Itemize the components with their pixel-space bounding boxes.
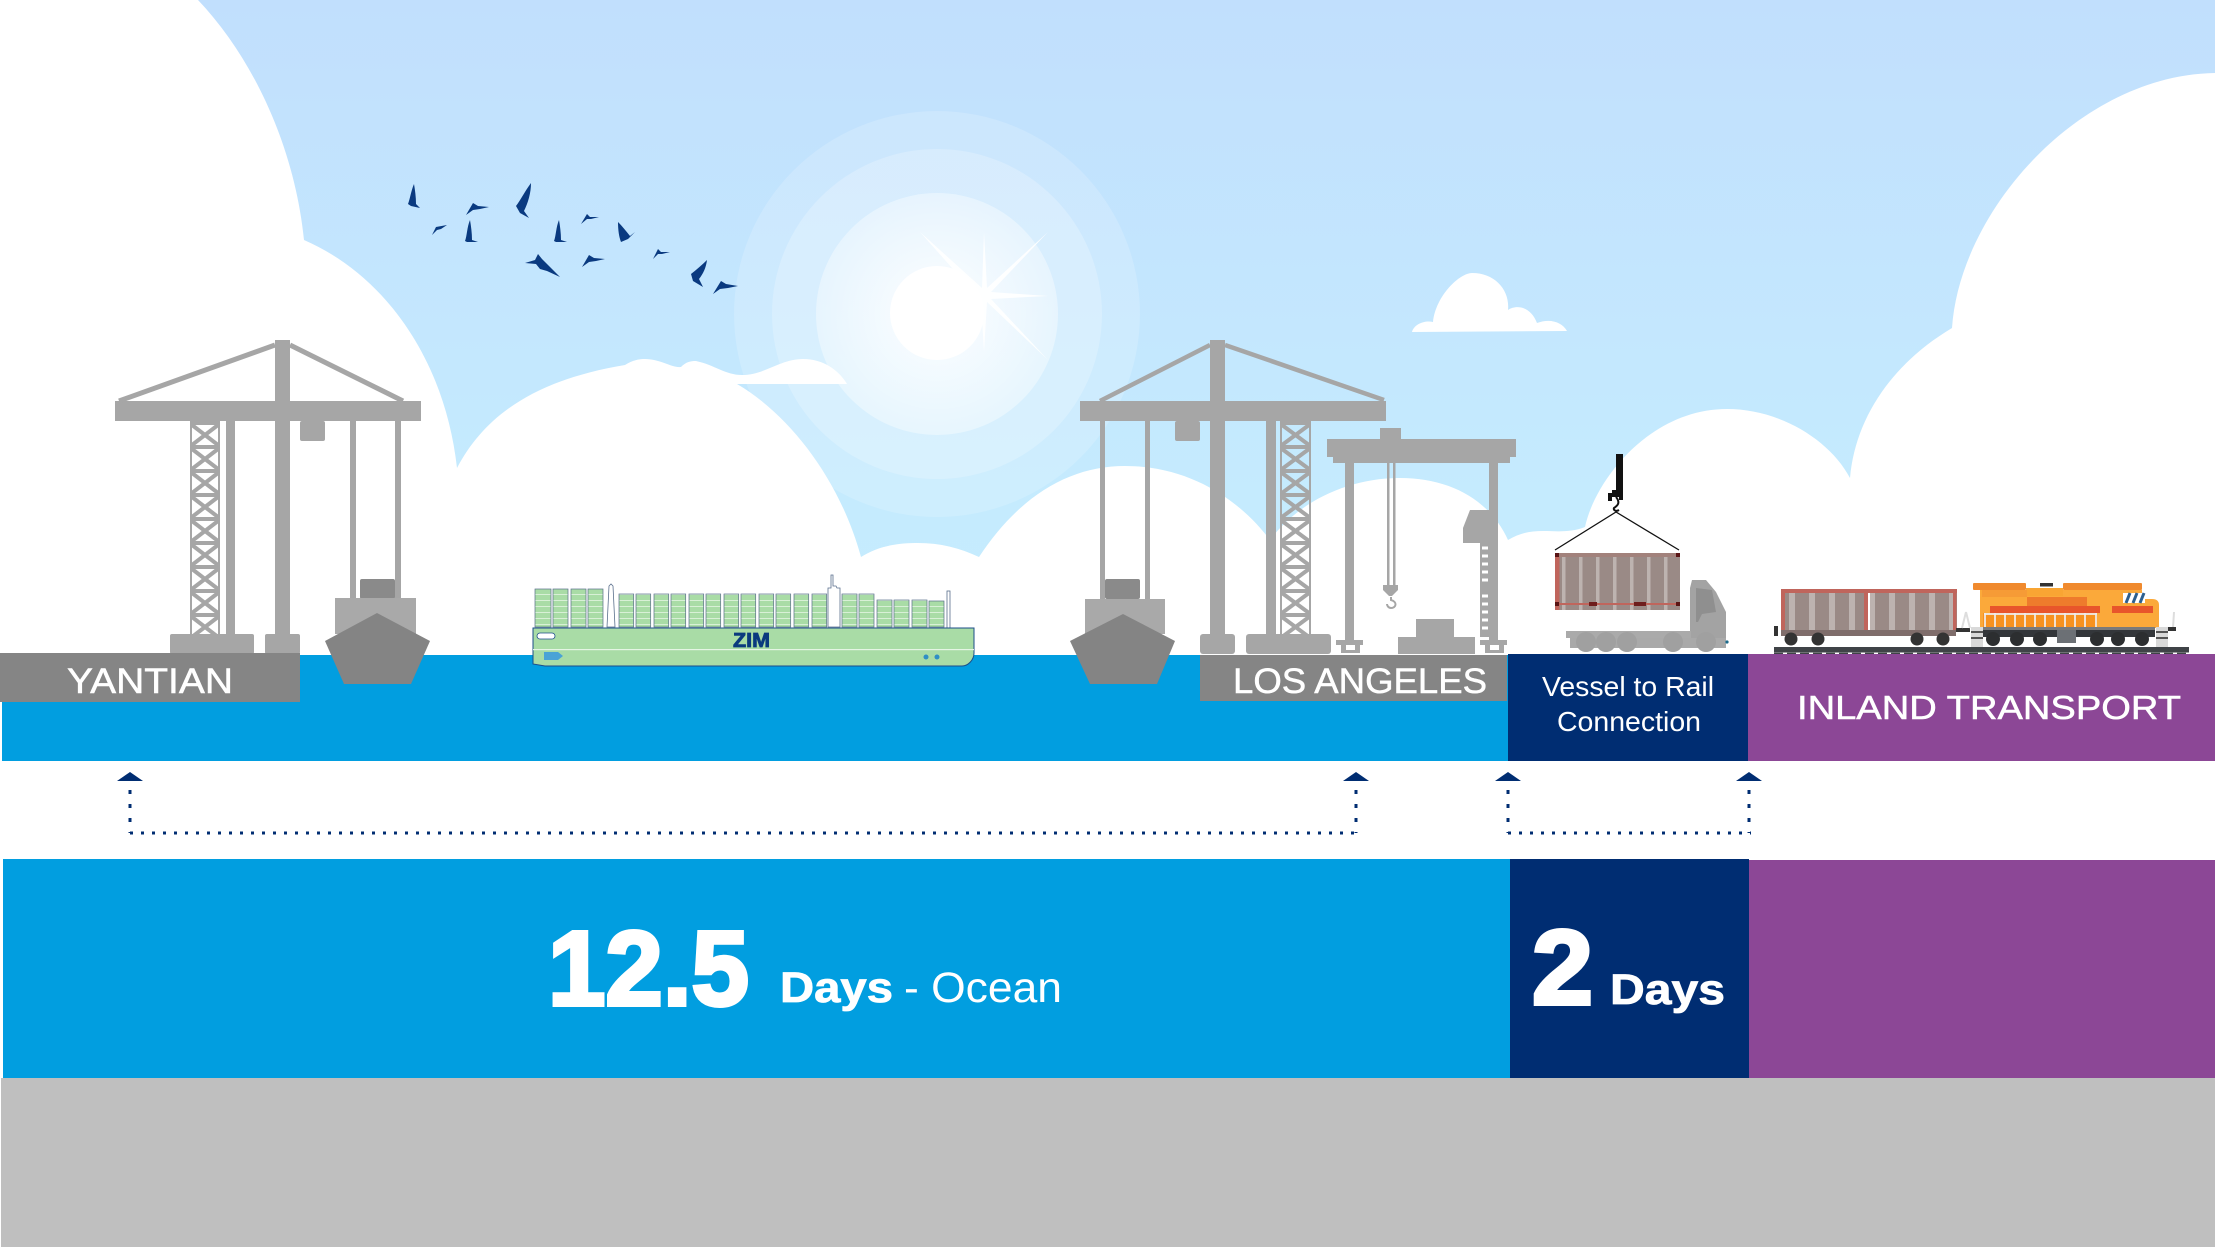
panel: vessel to rail connection: [1508, 654, 1748, 761]
panel: inland duration: [1749, 860, 2215, 1078]
panel: connection duration: Days: [1610, 966, 1725, 1014]
ocean band: [2, 655, 1508, 761]
clouds: [0, 0, 2215, 660]
ship silhouette: Los Angeles: [1070, 579, 1175, 684]
truck with hoisted container: [1555, 454, 1729, 652]
small cloud: [1412, 273, 1567, 332]
panel: ocean duration: [3, 859, 1510, 1078]
train on track: [1774, 583, 2189, 654]
panel: vessel to rail connection: Vessel to Rail: [1542, 671, 1714, 702]
container ship: ZIM: [533, 575, 974, 666]
arrow: ocean span bracket: [117, 772, 1369, 833]
panel: vessel to rail connection: Connection: [1557, 706, 1701, 737]
arrow: connection span bracket: [1495, 772, 1762, 833]
panel: connection duration: [1510, 859, 1749, 1078]
panel: inland transport: INLAND TRANSPORT: [1797, 689, 2181, 726]
ship silhouette: Yantian: [325, 579, 430, 684]
crane: Yantian: [115, 340, 421, 654]
gantry crane: [1327, 428, 1516, 654]
locomotive: [1962, 583, 2176, 647]
quay label: Los Angeles: LOS ANGELES: [1233, 662, 1487, 701]
panel: ocean duration: Days: [780, 964, 893, 1012]
quay label: Yantian: [0, 653, 300, 702]
quay label: Yantian: YANTIAN: [67, 662, 233, 701]
panel: ocean duration: 12.5: [548, 910, 749, 1028]
birds: [408, 183, 738, 294]
sky background: [0, 0, 2215, 660]
panel: inland transport: [1748, 654, 2215, 761]
sun with halo: [734, 111, 1140, 517]
container ship: ZIM: ZIM: [733, 630, 770, 652]
panel: connection duration: 2: [1532, 909, 1593, 1027]
footer band: [1, 1078, 2215, 1247]
panel: ocean duration: - Ocean: [904, 964, 1062, 1012]
crane: Los Angeles: [1080, 340, 1386, 654]
quay label: Los Angeles: [1200, 655, 1507, 701]
wagons with containers: [1774, 589, 1970, 646]
